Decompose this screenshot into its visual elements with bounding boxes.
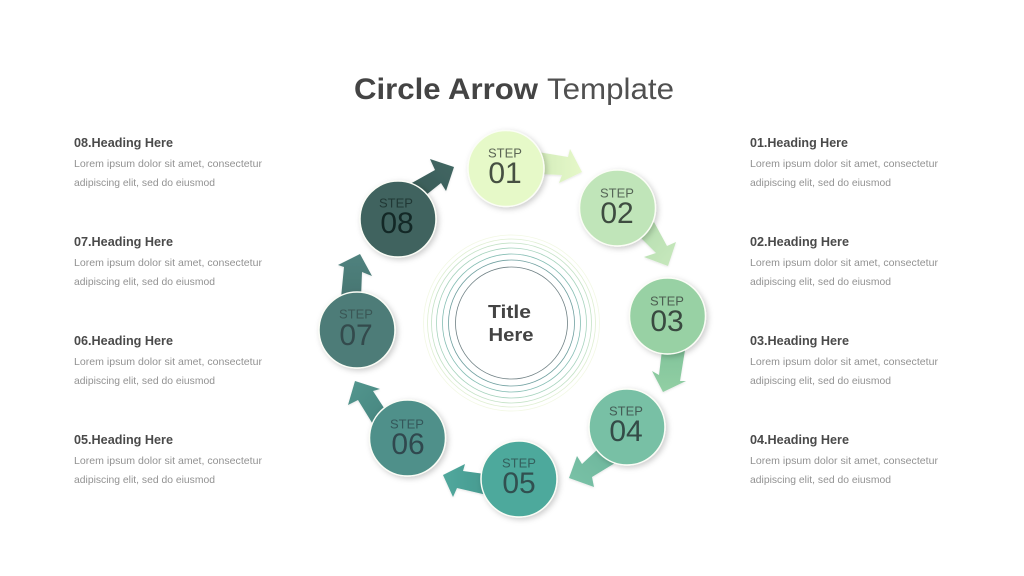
step 08: 08	[380, 207, 414, 240]
text block: 07 heading	[74, 235, 263, 288]
text block: 02 heading: Lorem ipsum dolor sit amet, consectetur	[750, 257, 939, 269]
step 04: 04	[609, 415, 643, 448]
text block: 08 heading	[74, 136, 263, 189]
step 06: 06	[391, 428, 425, 461]
text block: 06 heading: 06.Heading Here	[74, 334, 173, 348]
text block: 04 heading: adipiscing elit, sed do eiusmod	[750, 474, 891, 486]
title: Template	[547, 73, 674, 106]
arrow: 05 to 06	[443, 464, 487, 497]
text block: 03 heading	[750, 334, 939, 387]
center title	[488, 301, 534, 345]
step 03: 03	[650, 305, 684, 338]
step 07: 07	[339, 319, 373, 352]
text block: 01 heading: Lorem ipsum dolor sit amet, consectetur	[750, 158, 939, 170]
arrow: 01 to 02	[538, 149, 582, 183]
arrow: 08 to 01	[410, 159, 454, 195]
step 01: STEP	[488, 146, 522, 160]
text block: 06 heading: adipiscing elit, sed do eiusmod	[74, 375, 215, 387]
title	[354, 73, 674, 106]
text block: 01 heading: adipiscing elit, sed do eiusmod	[750, 177, 891, 189]
arrow: 04 to 05	[569, 450, 615, 487]
text block: 05 heading: adipiscing elit, sed do eiusmod	[74, 474, 215, 486]
text block: 08 heading: Lorem ipsum dolor sit amet, consectetur	[74, 158, 263, 170]
text block: 07 heading: adipiscing elit, sed do eiusmod	[74, 276, 215, 288]
step 03: STEP	[650, 294, 684, 308]
text block: 08 heading: adipiscing elit, sed do eiusmod	[74, 177, 215, 189]
step 01	[468, 130, 544, 206]
step 06: STEP	[390, 416, 424, 432]
text block: 03 heading: adipiscing elit, sed do eiusmod	[750, 375, 891, 387]
text block: 01 heading: 01.Heading Here	[750, 136, 848, 150]
center title: Here	[488, 324, 534, 345]
step 01: 01	[488, 157, 522, 190]
step 07: STEP	[339, 306, 373, 322]
step 08: STEP	[379, 196, 413, 210]
arrow: 06 to 07	[348, 381, 386, 426]
concentric rings	[424, 235, 600, 411]
step 05: STEP	[502, 456, 536, 470]
step 07	[319, 292, 395, 368]
text block: 05 heading: 05.Heading Here	[74, 433, 173, 447]
text block: 02 heading	[750, 235, 939, 288]
text block: 02 heading: 02.Heading Here	[750, 235, 849, 249]
step 05	[481, 441, 557, 517]
text block: 04 heading: 04.Heading Here	[750, 433, 849, 447]
text block: 01 heading	[750, 136, 939, 189]
text block: 08 heading: 08.Heading Here	[74, 136, 173, 150]
arrow: 07 to 08	[338, 254, 372, 298]
text block: 07 heading: Lorem ipsum dolor sit amet, consectetur	[74, 257, 263, 269]
step 02: 02	[600, 197, 634, 230]
text block: 05 heading: Lorem ipsum dolor sit amet, consectetur	[74, 455, 263, 467]
step 04	[589, 389, 665, 465]
text block: 03 heading: 03.Heading Here	[750, 334, 849, 348]
step 03	[630, 278, 706, 354]
title: Circle Arrow	[354, 73, 539, 106]
step 05: 05	[502, 467, 536, 500]
arrow: 03 to 04	[652, 350, 686, 392]
center title: Title	[488, 301, 531, 322]
text block: 03 heading: Lorem ipsum dolor sit amet, consectetur	[750, 356, 939, 368]
text block: 07 heading: 07.Heading Here	[74, 235, 173, 249]
text block: 02 heading: adipiscing elit, sed do eiusmod	[750, 276, 891, 288]
step 04: STEP	[609, 404, 643, 418]
text block: 06 heading	[74, 334, 263, 387]
step 08	[360, 181, 436, 257]
arrow: 02 to 03	[639, 222, 676, 266]
text block: 06 heading: Lorem ipsum dolor sit amet, consectetur	[74, 356, 263, 368]
text block: 05 heading	[74, 433, 263, 486]
text block: 04 heading: Lorem ipsum dolor sit amet, consectetur	[750, 455, 939, 467]
step 02: STEP	[600, 186, 634, 200]
step 02	[580, 170, 656, 246]
text block: 04 heading	[750, 433, 939, 486]
step 06	[370, 400, 446, 476]
